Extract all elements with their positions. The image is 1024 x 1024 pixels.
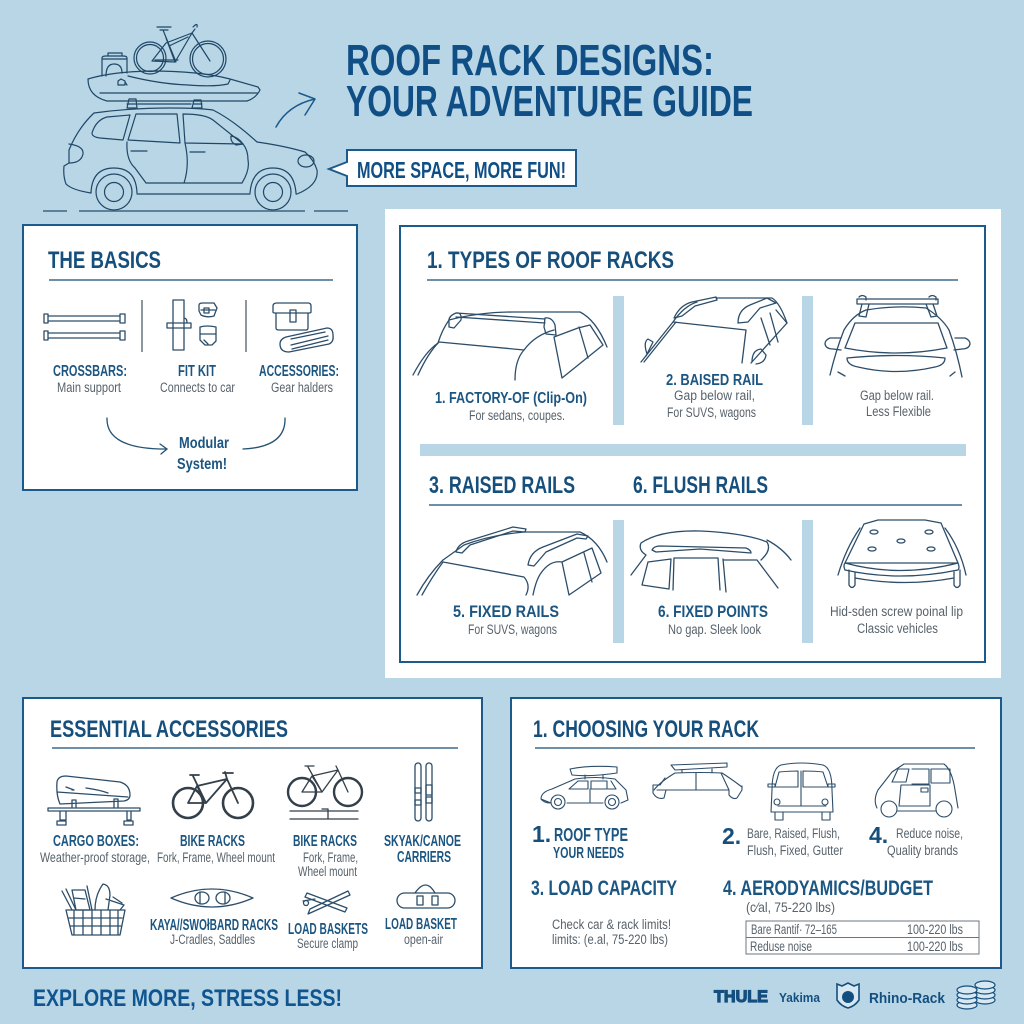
icon: clip-on rack on car	[413, 312, 607, 380]
title	[346, 36, 753, 126]
step: reduce noise: Reduce noise,	[896, 826, 963, 841]
icon: front view car with bars	[825, 296, 970, 377]
step: load capacity: Check car & rack limits!	[552, 917, 671, 932]
callout: more space, more fun	[329, 150, 576, 186]
icon: car with roof bar	[653, 763, 742, 799]
label: factory	[435, 390, 587, 423]
label: kayak board racks: J-Cradles, Saddles	[170, 932, 255, 947]
label: accessories: Gear halders	[271, 380, 333, 395]
heading: raised rails: 3. RAISED RAILS	[429, 472, 575, 499]
step: roof type: 1.	[532, 821, 551, 847]
heading: essential accessories: ESSENTIAL ACCESSORIES	[50, 716, 288, 743]
step: bare raised flush	[722, 823, 843, 858]
step: reduce noise: 4.	[869, 822, 888, 848]
icon: coin stacks	[957, 981, 995, 1009]
icon: wagon with roof box	[541, 766, 628, 809]
road line	[43, 210, 348, 212]
label: fixed points: No gap. Sleek look	[668, 622, 761, 637]
label: bike racks: Fork, Frame, Wheel mount	[157, 850, 275, 865]
callout: more space, more fun: MORE SPACE, MORE FUN!	[357, 157, 566, 183]
label: load basket	[385, 916, 457, 947]
label: gap below rail: Less Flexible	[866, 404, 931, 419]
icon: cargo box on rack	[48, 776, 140, 825]
label: crossbars: CROSSBARS:	[53, 363, 127, 380]
label: kayak board racks: KAYA//SWOłBARD RACKS	[150, 917, 278, 934]
label: crossbars	[53, 363, 127, 395]
icon: cooler	[102, 53, 127, 76]
label: raised rail	[666, 372, 763, 420]
label: fit kit: FIT KIT	[178, 363, 216, 380]
label: kayak canoe carriers: CARRIERS	[397, 849, 451, 866]
icon: load basket	[62, 884, 125, 935]
heading: types of roof racks: 1. TYPES OF ROOF RACKS	[427, 247, 674, 274]
step: load capacity	[531, 877, 677, 947]
icon: bike	[134, 24, 226, 77]
logo: yakima: Yakima	[779, 990, 821, 1005]
label: kayak canoe carriers	[384, 833, 461, 866]
icon: fixed points on car	[631, 531, 791, 592]
label: fixed points: 6. FIXED POINTS	[658, 602, 768, 621]
step: aerodynamics budget: 4. AERODYAMICS/BUDGET	[723, 877, 933, 900]
logo: shield	[837, 983, 859, 1008]
icon: front view car	[768, 763, 835, 820]
label: raised rail: For SUVS, wagons	[667, 405, 756, 420]
label: modular system	[177, 435, 229, 473]
icon: compact car side view	[875, 764, 958, 817]
step: roof type: ROOF TYPE	[554, 825, 628, 845]
logo: rhino-rack: Rhino-Rack	[869, 990, 946, 1007]
label: cargo boxes	[40, 833, 150, 865]
panel: essential accessories	[23, 698, 482, 968]
icon: raised rail on car	[641, 297, 787, 364]
panel: choosing your rack	[511, 698, 1001, 968]
icon: kayak top view	[171, 889, 253, 907]
step: bare raised flush: Bare, Raised, Flush,	[747, 826, 840, 841]
icon: snowboard	[397, 885, 455, 908]
icon: skis	[415, 763, 432, 821]
icon: fixed rails on car	[417, 527, 607, 595]
label: bike racks second: Fork, Frame,	[303, 850, 358, 865]
icon: fit kit	[167, 300, 217, 350]
hero illustration: car with kayak, bike and cooler on roof	[43, 24, 348, 211]
step: reduce noise: Quality brands	[887, 843, 958, 858]
label: bike racks second: Wheel mount	[298, 864, 357, 879]
roof rack towers	[127, 99, 202, 108]
table: load limits: Bare Rantif· 72–165	[751, 922, 837, 937]
step: bare raised flush: Flush, Fixed, Gutter	[747, 843, 843, 858]
logo: thule: THULE	[714, 987, 768, 1006]
label: fixed rails	[453, 602, 559, 637]
title: YOUR ADVENTURE GUIDE	[346, 77, 753, 126]
table: load limits	[746, 921, 979, 954]
label: hidden screw: Classic vehicles	[857, 621, 938, 636]
label: fixed rails: 5. FIXED RAILS	[453, 602, 559, 621]
arrows to modular system	[107, 418, 285, 454]
heading: choosing your rack: 1. CHOOSING YOUR RACK	[533, 716, 759, 743]
label: kayak canoe carriers: SKYAK/CANOE	[384, 833, 461, 850]
label: factory: 1. FACTORY-OF (Clip-On)	[435, 390, 587, 407]
icon: bike on roof mount	[288, 766, 362, 819]
label: gap below rail: Gap below rail.	[860, 388, 934, 403]
arrow to title	[276, 93, 315, 127]
label: load baskets: Secure clamp	[297, 936, 358, 951]
label: raised rail: Gap below rail,	[674, 388, 755, 403]
icon: bike	[173, 772, 253, 818]
car body	[64, 108, 317, 210]
label: modular system: Modular	[179, 435, 229, 452]
step: aerodynamics budget	[723, 877, 933, 915]
label: accessories: ACCESSORIES:	[259, 363, 339, 380]
label: fit kit: Connects to car	[160, 380, 235, 395]
label: cargo boxes: CARGO BOXES:	[53, 833, 139, 850]
label: hidden screw	[830, 604, 963, 636]
step: roof type: YOUR NEEDS	[553, 845, 624, 862]
step: load capacity: limits: (e.al, 75-220 lbs)	[552, 932, 668, 947]
heading: flush rails: 6. FLUSH RAILS	[633, 472, 768, 499]
label: fixed rails: For SUVS, wagons	[468, 622, 557, 637]
table: load limits: 100-220 lbs	[907, 922, 963, 937]
label: bike racks	[157, 833, 275, 865]
label: load baskets	[288, 921, 368, 951]
table: load limits: 100-220 lbs	[907, 939, 963, 954]
label: load basket: LOAD BASKET	[385, 916, 457, 933]
icon: crossbars	[44, 314, 125, 340]
table: load limits: Reduse noise	[750, 939, 812, 954]
step: roof type	[532, 821, 628, 862]
label: hidden screw: Hid-sden screw poinal lip	[830, 604, 963, 619]
step: load capacity: 3. LOAD CAPACITY	[531, 877, 677, 900]
label: bike racks: BIKE RACKS	[180, 833, 245, 850]
heading: the basics: THE BASICS	[48, 247, 161, 274]
label: modular system: System!	[177, 456, 227, 473]
panel: types of roof racks	[385, 209, 1001, 678]
label: load basket: open-air	[404, 932, 443, 947]
label: factory: For sedans, coupes.	[469, 408, 565, 423]
icon: accessories	[273, 303, 333, 352]
label: accessories	[259, 363, 339, 395]
icon: kayak	[88, 71, 260, 101]
label: gap below rail	[860, 388, 934, 419]
label: bike racks second: BIKE RACKS	[293, 833, 357, 850]
icon: crossed skis	[303, 891, 350, 914]
label: crossbars: Main support	[57, 380, 121, 395]
icon: roof with fixed mounting points	[838, 520, 966, 588]
label: load baskets: LOAD BASKETS	[288, 921, 368, 938]
title: ROOF RACK DESIGNS:	[346, 36, 714, 85]
label: cargo boxes: Weather-proof storage,	[40, 850, 150, 865]
step: reduce noise	[869, 822, 963, 858]
label: bike racks second	[293, 833, 358, 879]
label: raised rail: 2. BAISED RAIL	[666, 372, 763, 389]
step: aerodynamics budget: (c⁄al, 75-220 lbs)	[746, 900, 835, 915]
brand logos	[714, 981, 995, 1009]
step: bare raised flush: 2.	[722, 823, 741, 849]
label: fixed points	[658, 602, 768, 637]
footer slogan: EXPLORE MORE, STRESS LESS!	[33, 985, 342, 1012]
label: fit kit	[160, 363, 235, 395]
label: kayak board racks	[150, 917, 278, 947]
panel: the basics	[23, 225, 357, 490]
